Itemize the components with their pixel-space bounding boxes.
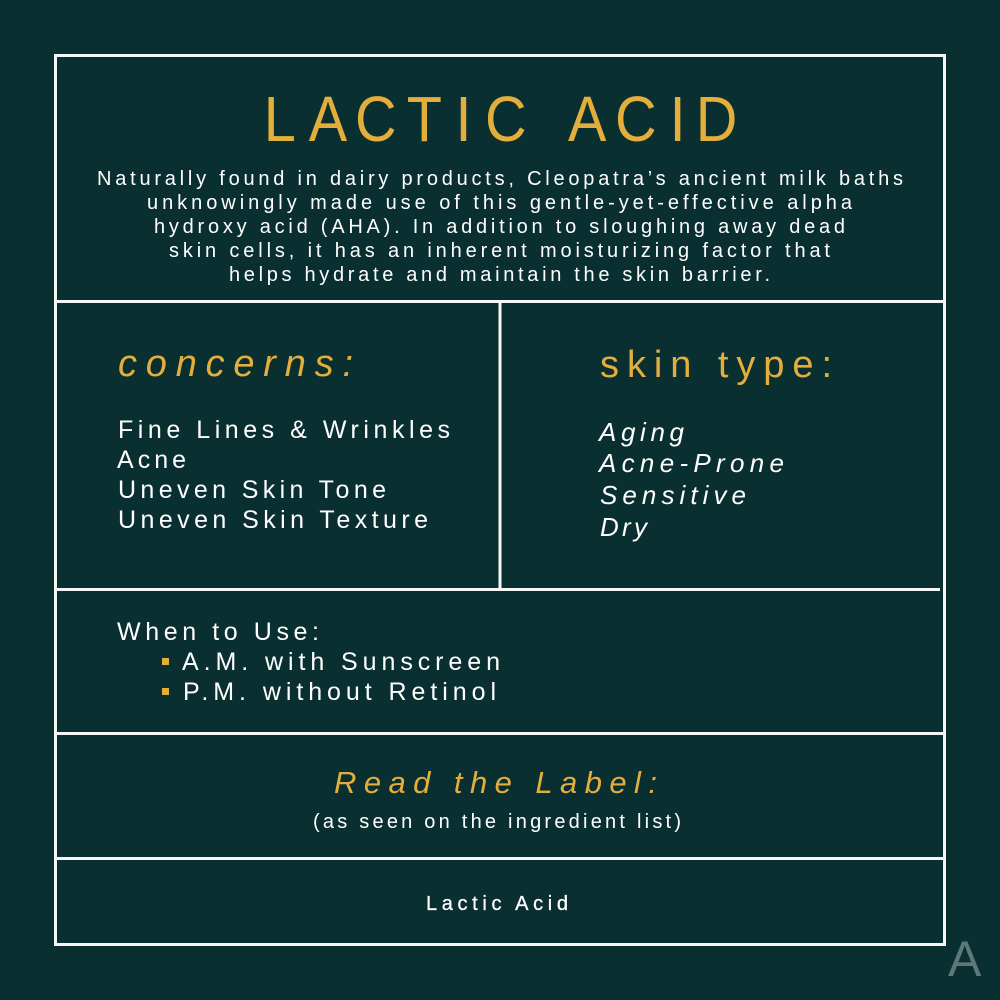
text block: when to use xyxy=(117,618,500,706)
text block: skin type list: Sensitive xyxy=(600,480,746,510)
text block: concerns list: Uneven Skin Texture xyxy=(118,506,428,534)
heading: read the label: Read the Label: xyxy=(334,765,657,800)
text block: description: helps hydrate and maintain the skin barrier. xyxy=(229,264,770,286)
text block: skin type list xyxy=(597,417,784,542)
text block: skin type list: Dry xyxy=(600,512,649,542)
icon: bullet P.M. xyxy=(162,688,169,695)
title: LACTIC ACID xyxy=(264,83,737,155)
text block: concerns list: Fine Lines & Wrinkles xyxy=(118,416,450,444)
text block: skin type list: Aging xyxy=(597,417,685,447)
heading: concerns: concerns: xyxy=(118,343,353,385)
text block: label note: (as seen on the ingredient list) xyxy=(313,811,681,833)
icon: bullet A.M. xyxy=(162,658,169,665)
heading: skin type: skin type: xyxy=(600,344,832,386)
text block: when to use: P.M. without Retinol xyxy=(183,678,496,706)
text block: concerns list: Uneven Skin Tone xyxy=(118,476,386,504)
text block: concerns list: Acne xyxy=(117,446,186,474)
panel: outer frame with dividers xyxy=(56,56,944,944)
text block: description: Naturally found in dairy products, Cleopatra’s ancient milk baths xyxy=(97,168,903,190)
text block: description: skin cells, it has an inherent moisturizing factor that xyxy=(169,240,830,262)
text block: skin type list: Acne-Prone xyxy=(597,448,784,478)
text block: when to use: A.M. with Sunscreen xyxy=(182,648,500,676)
text block: ingredient name: Lactic Acid xyxy=(426,893,568,915)
icon: watermark letter A: A xyxy=(948,931,982,987)
text block: description: hydroxy acid (AHA). In addition to sloughing away dead xyxy=(154,216,845,238)
text block: concerns list xyxy=(117,416,450,534)
text block: when to use: When to Use: xyxy=(117,618,319,646)
text block: description xyxy=(97,168,903,286)
text block: description: unknowingly made use of this gentle-yet-effective alpha xyxy=(147,192,853,214)
